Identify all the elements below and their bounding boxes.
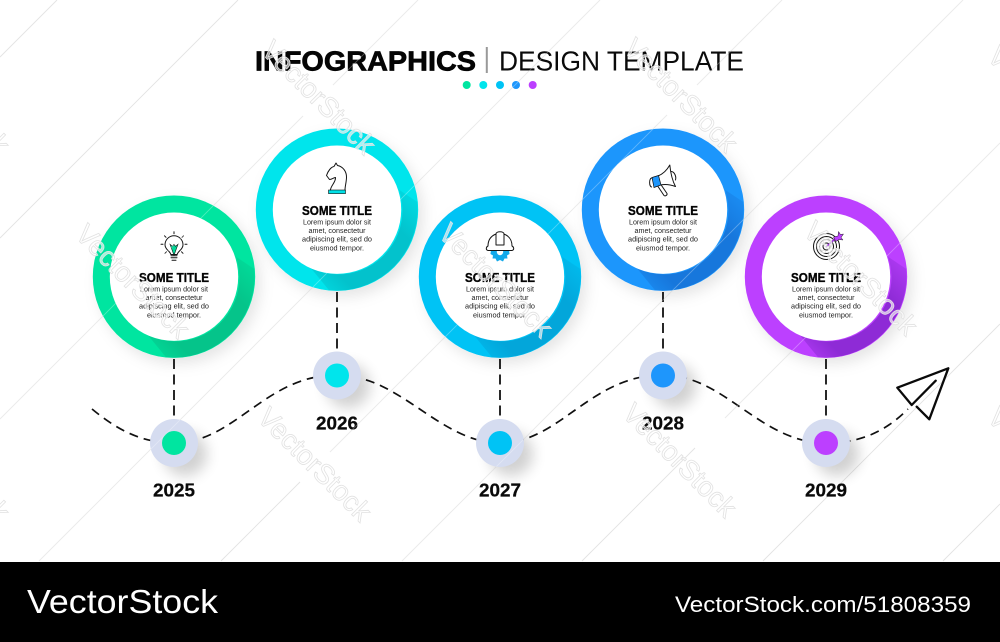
year: 2026: 2026 [316,414,358,434]
body text: 2025: eiusmod tempor. [147,312,201,319]
ring: blue [582,128,744,291]
body text: 2026: adipiscing elit, sed do [302,237,372,244]
connector: 2026 [336,292,338,352]
icon: target with dart [814,232,844,260]
title: divider [486,47,488,73]
year: 2025: 2025 [153,480,195,500]
milestone 2027 [419,196,581,501]
icon: light bulb [161,232,187,260]
watermarks: VectorStock [618,32,744,159]
heading: 2026: SOME TITLE [302,204,372,218]
body text: 2029: eiusmod tempor. [799,312,853,319]
heading: 2027: SOME TITLE [465,271,535,285]
milestone 2025 [93,196,255,501]
node: 2026 [313,352,370,408]
body text: 2028 [628,219,698,252]
footer: image id: VectorStock.com/51808359 [675,592,971,617]
body text: 2027: adipiscing elit, sed do [465,304,535,311]
body text: 2029 [791,286,861,319]
body text: 2027 [465,286,535,319]
connector: 2025 [173,359,175,420]
title: bold part: INFOGRAPHICS [255,46,476,77]
watermarks: VectorStock [617,397,743,524]
watermarks: VectorStock [252,401,378,528]
body text: 2027: Lorem ipsum dolor sit [466,286,534,293]
watermarks: VectorStock [70,218,196,345]
connector: 2028 [662,292,664,352]
body text: 2026: eiusmod tempor. [310,245,364,252]
body text: 2027: amet, consectetur [472,295,529,302]
node: 2027 [476,419,533,476]
node: 2029 [802,419,859,476]
body text: 2025 [139,286,209,319]
year: 2027: 2027 [479,480,521,500]
heading: 2028: SOME TITLE [628,204,698,218]
heading: 2025: SOME TITLE [139,271,209,285]
ring: purple [745,196,907,358]
body text: 2029: amet, consectetur [798,295,855,302]
timeline: dashed wavy path [92,375,908,443]
icon: hard hat and gear [486,232,514,262]
connector: 2029 [825,359,827,420]
watermarks: VectorStock [256,34,382,161]
body text: 2029: Lorem ipsum dolor sit [792,286,860,293]
ring: green [93,196,255,358]
ring: cyan [256,128,418,291]
year: 2028: 2028 [642,414,684,434]
watermarks [0,32,1000,528]
heading: 2029: SOME TITLE [791,271,861,285]
body text: 2028: adipiscing elit, sed do [628,237,698,244]
footer bar [0,562,1000,642]
node: 2028 [639,352,696,408]
body text: 2026 [302,219,372,252]
body text: 2028: eiusmod tempor. [636,245,690,252]
footer: logo text: VectorStock [27,583,219,620]
title: coloured dots [463,81,537,89]
title [255,46,744,89]
body text: 2027: eiusmod tempor. [473,312,527,319]
watermarks: VectorStock [433,217,559,344]
milestone 2029 [745,196,907,501]
title: regular part: DESIGN TEMPLATE [499,46,744,77]
body text: 2028: amet, consectetur [634,228,692,235]
node: 2025 [150,419,207,476]
body text: 2026: amet, consectetur [308,228,366,235]
body text: 2025: amet, consectetur [146,295,203,302]
ring: sky blue [419,196,581,358]
body text: 2025: Lorem ipsum dolor sit [140,286,208,293]
body text: 2025: adipiscing elit, sed do [139,304,209,311]
body text: 2028: Lorem ipsum dolor sit [629,219,697,226]
body text: 2026: Lorem ipsum dolor sit [303,219,371,226]
icon: paper plane [897,368,948,419]
icon: megaphone [650,165,676,196]
milestone 2028 [582,128,744,434]
body text: 2029: adipiscing elit, sed do [791,304,861,311]
year: 2029: 2029 [805,480,847,500]
icon: chess knight [326,163,346,194]
connector: 2027 [499,359,501,420]
milestone 2026 [256,128,418,434]
watermarks: VectorStock [798,215,924,342]
